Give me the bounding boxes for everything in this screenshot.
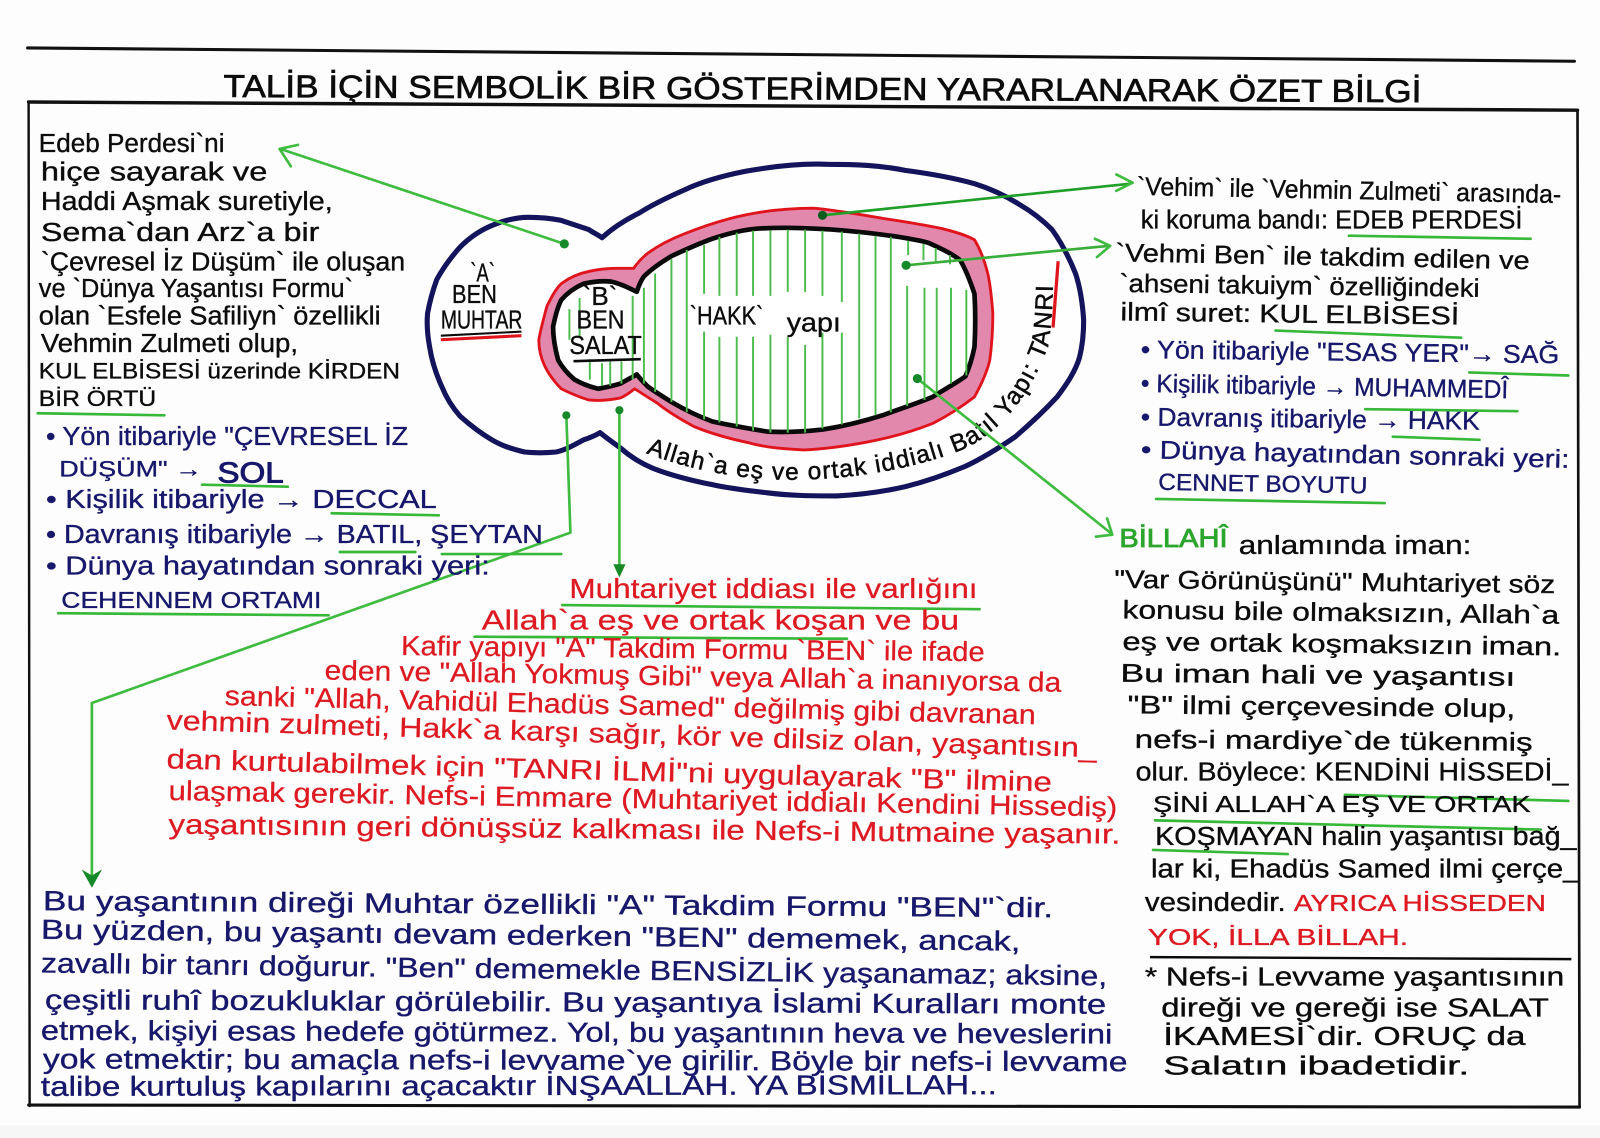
text block: top right black notes: `ahseni takuiym` özelliğindeki bbox=[1119, 270, 1480, 303]
label: A BEN MUHTAR: MUHTAR bbox=[441, 307, 522, 335]
list: left navy properties: SOL bbox=[217, 458, 284, 490]
list: right navy properties: • Davranış itibariyle → HAKK bbox=[1141, 403, 1480, 436]
text block: Billahi explanation: İKAMESİ`dir. ORUÇ da bbox=[1163, 1022, 1527, 1051]
text block: bottom navy paragraph: çeşitli ruhî bozukluklar görülebilir. Bu yaşantıya İslami Kuralları monte bbox=[45, 984, 1106, 1020]
text block: bottom navy paragraph bbox=[41, 885, 1128, 1102]
text block: central red paragraph: sanki "Allah, Vahidül Ehadüs Samed" değilmiş gibi davranan bbox=[224, 680, 1036, 730]
text block: central red paragraph: vehmin zulmeti, Hakk`a karşı sağır, kör ve dilsiz olan, yaşantısın_ bbox=[166, 705, 1098, 763]
text block: top right black notes: ki koruma bandı: EDEB PERDESİ bbox=[1141, 206, 1522, 235]
label: HAKK yapı: `HAKK` bbox=[690, 302, 763, 330]
inner white area with black outline bbox=[553, 228, 975, 432]
text block: central red paragraph: yaşantısının geri dönüşsüz kalkması ile Nefs-i Mutmaine yaşanır. bbox=[168, 809, 1121, 850]
text block: Billahi explanation: ŞİNİ ALLAH`A EŞ VE ORTAK bbox=[1153, 791, 1531, 817]
text block: bottom navy paragraph: Bu yüzden, bu yaşantı devam ederken "BEN" dememek, ancak, bbox=[41, 914, 1021, 957]
text block: Billahi explanation bbox=[1114, 524, 1580, 1080]
text block: central red paragraph: Allah`a eş ve ortak koşan ve bu bbox=[482, 605, 959, 636]
text block: bottom navy paragraph: yok etmektir; bu amaçla nefs-i levvame`ye girilir. Böyle bir nefs-i levvame bbox=[43, 1043, 1128, 1077]
text block: Billahi explanation: eş ve ortak koşmaksızın iman. bbox=[1122, 628, 1561, 661]
arrow: hatch to Billahi text bbox=[913, 374, 1112, 537]
text block: Billahi explanation: Bu iman hali ve yaşantısı bbox=[1120, 660, 1515, 692]
text block: Billahi explanation: "Var Görünüşünü" Muhtariyet söz bbox=[1114, 566, 1555, 599]
text block: central red paragraph: ulaşmak gerekir. Nefs-i Emmare (Muhtariyet iddialı Kendini Hissediş) bbox=[168, 775, 1118, 823]
labels inside diagram bbox=[440, 260, 1060, 484]
list: left navy properties: • Davranış itibariyle → BATIL, ŞEYTAN bbox=[46, 521, 543, 549]
label: HAKK yapı: yapı bbox=[787, 310, 841, 338]
label: B BEN SALAT: SALAT bbox=[569, 332, 642, 360]
text block: central red paragraph bbox=[166, 573, 1121, 850]
list: right navy properties: • Yön itibariyle "ESAS YER"→ SAĞ bbox=[1141, 335, 1559, 369]
list: right navy properties bbox=[1141, 335, 1570, 503]
text block: bottom navy paragraph: etmek, kişiyi esas hedefe götürmez. Yol, bu yaşantının heva ve heveslerini bbox=[41, 1015, 1112, 1049]
label: A BEN MUHTAR: BEN bbox=[452, 281, 497, 309]
text block: left black description: BİR ÖRTÜ bbox=[39, 386, 156, 411]
text block: left black description: Haddi Aşmak suretiyle, bbox=[41, 188, 333, 216]
arrow: hatch to Kul Elbisesi note bbox=[902, 239, 1110, 270]
text block: Billahi explanation: vesindedir. bbox=[1145, 889, 1286, 917]
text block: Billahi explanation: BİLLAHÎ bbox=[1119, 524, 1229, 553]
list: left navy properties: • Yön itibariyle "ÇEVRESEL İZ bbox=[46, 422, 408, 451]
text block: Billahi explanation: Salatın ibadetidir. bbox=[1163, 1052, 1469, 1080]
arrow: diagram to Edeb Perdesi text bbox=[280, 145, 569, 248]
text block: Billahi explanation: "B" ilmi çerçevesinde olup, bbox=[1127, 691, 1515, 723]
text block: Billahi explanation: YOK, İLLA BİLLAH. bbox=[1148, 924, 1408, 950]
text block: Billahi explanation: KOŞMAYAN halin yaşantısı bağ_ bbox=[1155, 823, 1577, 851]
list: left navy properties bbox=[46, 422, 561, 615]
label: A BEN MUHTAR bbox=[441, 260, 522, 340]
text block: left black description: `Çevresel İz Düşüm` ile oluşan bbox=[41, 247, 405, 276]
diagram: symbolic form bbox=[424, 162, 1086, 498]
text block: left black description: olan `Esfele Safiliyn` özellikli bbox=[39, 302, 381, 330]
text block: top right black notes bbox=[1115, 173, 1562, 338]
text block: Billahi explanation: * Nefs-i Levvame yaşantısının bbox=[1145, 964, 1564, 992]
label: HAKK yapı bbox=[690, 302, 841, 338]
title: TALİB İÇİN SEMBOLİK BİR GÖSTERİMDEN YARARLANARAK ÖZET BİLGİ bbox=[223, 68, 1422, 109]
label: B BEN SALAT bbox=[569, 283, 642, 361]
text block: Billahi explanation: direği ve gereği ise SALAT bbox=[1161, 994, 1549, 1022]
text block: Billahi explanation: olur. Böylece: KENDİNİ HİSSEDİ_ bbox=[1136, 758, 1569, 787]
label: B BEN SALAT: BEN bbox=[577, 307, 624, 335]
text block: Billahi explanation: konusu bile olmaksızın, Allah`a bbox=[1122, 596, 1560, 630]
text block: central red paragraph: Muhtariyet iddiası ile varlığını bbox=[569, 573, 978, 604]
text block: Billahi explanation: lar ki, Ehadüs Samed ilmi çerçe_ bbox=[1151, 856, 1580, 884]
arrow: diagram to navy bottom text bbox=[82, 411, 570, 888]
text block: top right black notes: `Vehmi Ben` ile takdim edilen ve bbox=[1115, 239, 1530, 275]
text block: bottom navy paragraph: talibe kurtuluş kapılarını açacaktır İNŞAALLAH. YA BİSMİLLAH... bbox=[41, 1069, 997, 1102]
text block: left black description: Edeb Perdesi`ni bbox=[39, 130, 225, 158]
text block: top right black notes: ilmî suret: KUL ELBİSESİ bbox=[1120, 297, 1459, 331]
text block: Billahi explanation: nefs-i mardiye`de tükenmiş bbox=[1135, 726, 1533, 757]
text block: left black description bbox=[38, 130, 405, 415]
list: right navy properties: • Dünya hayatından sonraki yeri: bbox=[1141, 436, 1570, 474]
arrow: band to Edeb Perdesi note bbox=[818, 174, 1133, 220]
list: left navy properties: CEHENNEM ORTAMI bbox=[61, 587, 321, 613]
pink band: Edeb Perdesi bbox=[539, 208, 993, 450]
arrow: diagram to red text bbox=[613, 406, 626, 578]
label: A BEN MUHTAR: `A` bbox=[470, 260, 495, 288]
list: right navy properties: • Kişilik itibariyle → MUHAMMEDÎ bbox=[1141, 369, 1509, 404]
text block: left black description: Vehmin Zulmeti olup, bbox=[41, 330, 298, 358]
label: B BEN SALAT: `B` bbox=[583, 283, 617, 311]
text block: central red paragraph: dan kurtulabilmek için "TANRI İLMİ"ni uygulayarak "B" ilmine bbox=[166, 743, 1052, 798]
text block: top right black notes: `Vehim` ile `Vehmin Zulmeti` arasında- bbox=[1137, 173, 1562, 209]
outer outline: false structure bbox=[427, 164, 1084, 496]
text block: left black description: KUL ELBİSESİ üzerinde KİRDEN bbox=[39, 359, 400, 384]
text block: bottom navy paragraph: Bu yaşantının direği Muhtar özellikli "A" Takdim Formu "BEN"`dir. bbox=[43, 885, 1053, 923]
text block: bottom navy paragraph: zavallı bir tanrı doğurur. "Ben" dememekle BENSİZLİK yaşanamaz; aksine, bbox=[41, 947, 1107, 991]
vertical green hatching: Hakk structure bbox=[569, 230, 966, 433]
text block: left black description: hiçe sayarak ve bbox=[41, 159, 267, 187]
text block: central red paragraph: eden ve "Allah Yokmuş Gibi" veya Allah`a inanıyorsa da bbox=[324, 655, 1062, 698]
list: left navy properties: • Kişilik itibariyle → DECCAL bbox=[46, 486, 437, 514]
text block: Billahi explanation: anlamında iman: bbox=[1239, 532, 1471, 560]
list: right navy properties: CENNET BOYUTU bbox=[1158, 469, 1368, 498]
text block: Billahi explanation: AYRICA HİSSEDEN bbox=[1294, 890, 1546, 916]
text block: central red paragraph: Kafir yapıyı "A" Takdim Formu `BEN` ile ifade bbox=[401, 630, 985, 667]
list: left navy properties: • Dünya hayatından sonraki yeri: bbox=[46, 552, 490, 580]
curved label: false structure: Allah`a eş ve ortak iddialı Batıl Yapı: TANRI bbox=[646, 287, 1054, 484]
list: left navy properties: DÜŞÜM" → bbox=[59, 457, 202, 482]
text block: left black description: Sema`dan Arz`a bir bbox=[41, 219, 320, 247]
text block: left black description: ve `Dünya Yaşantısı Formu` bbox=[39, 275, 353, 303]
